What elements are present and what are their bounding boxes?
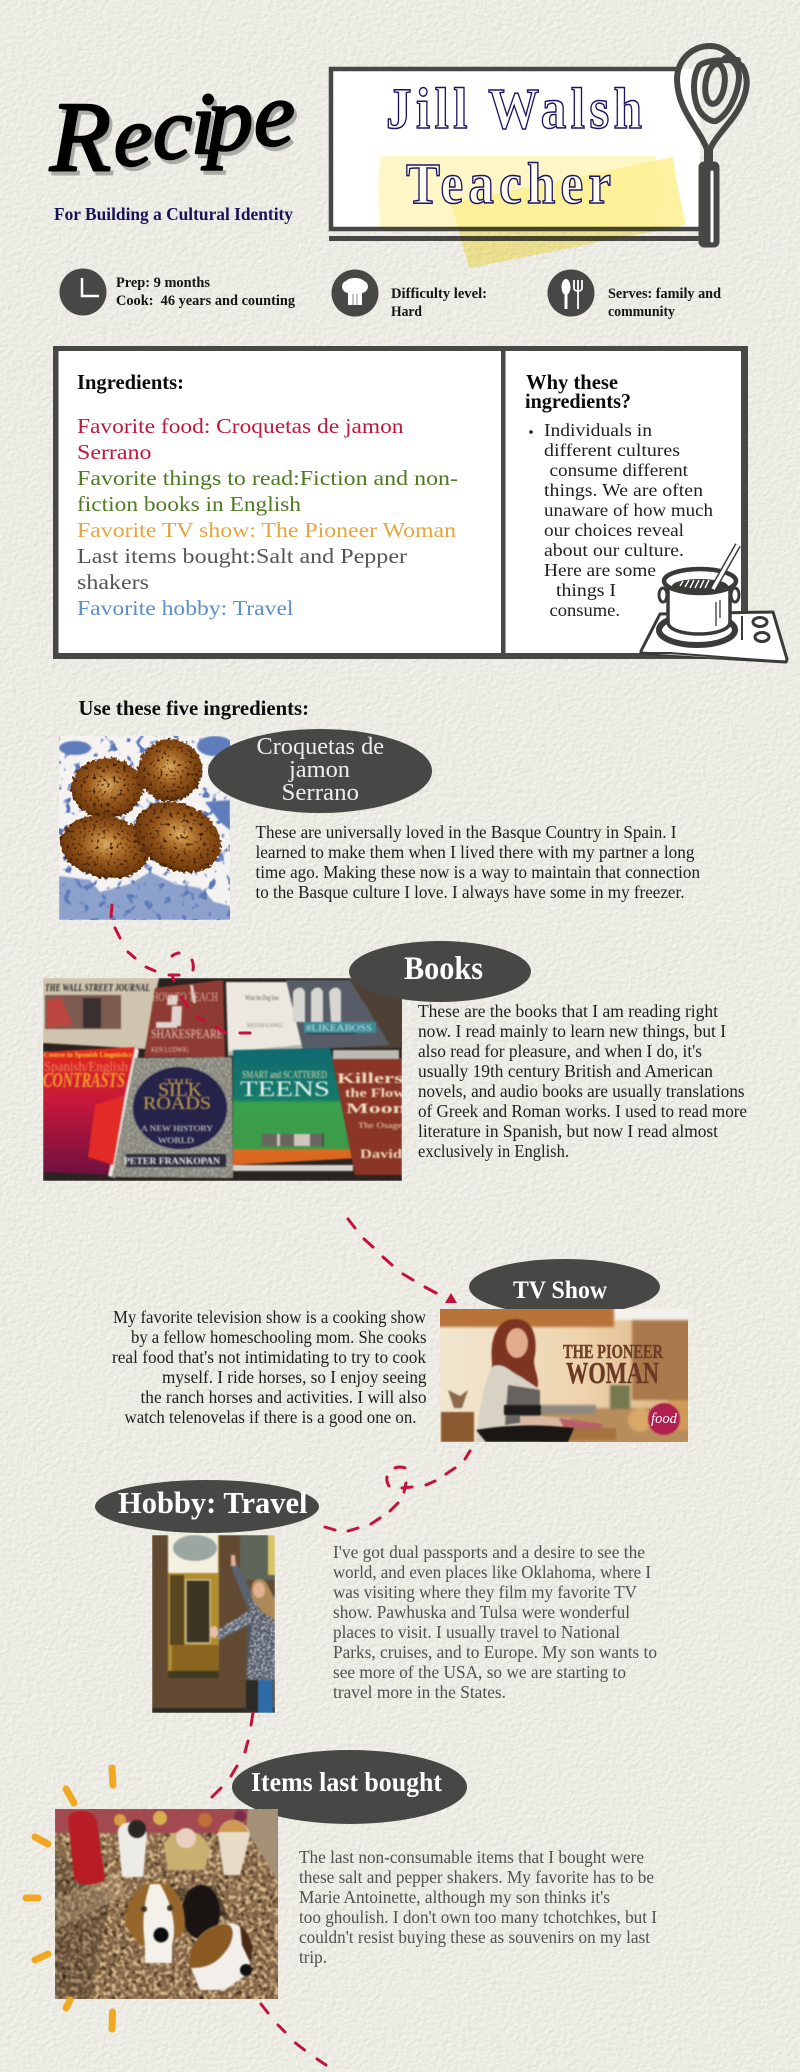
photo: stack of books: SMART and SCATTERED bbox=[242, 1069, 327, 1081]
decoration: orange sun rays bbox=[26, 1768, 113, 2029]
photo: stack of books: Killers bbox=[337, 1071, 403, 1087]
text: TV show: myself. I ride horses, so I enjoy seeing bbox=[162, 1367, 427, 1387]
ingredient list: Last items bought:Salt and Pepper bbox=[77, 544, 407, 568]
stat: prep and cook time: Prep: 9 months bbox=[116, 275, 210, 291]
panel: ingredients and why bbox=[53, 346, 748, 659]
text: travel: world, and even places like Oklahoma, where I bbox=[333, 1562, 651, 1582]
arrow: route continuing off page bbox=[261, 2004, 326, 2065]
stat: prep and cook time: Cook: 46 years and counting bbox=[116, 293, 296, 309]
text: TV show: real food that's not intimidating to try to cook bbox=[112, 1347, 426, 1367]
heading: Why these ingredients: Why these bbox=[526, 370, 618, 394]
heading pill: Hobby Travel bbox=[95, 1480, 319, 1533]
arrow: route from books to TV show bbox=[348, 1219, 457, 1303]
text: travel: I've got dual passports and a desire to see the bbox=[333, 1542, 645, 1562]
why text: our choices reveal bbox=[544, 520, 684, 540]
photo: stack of books: HOW TO TEACH bbox=[152, 989, 218, 1004]
text: books: usually 19th century British and American bbox=[418, 1061, 713, 1081]
why text: Individuals in bbox=[544, 420, 652, 440]
text: travel bbox=[333, 1542, 657, 1702]
heading pill: Items last bought: Items last bought bbox=[251, 1767, 442, 1797]
photo: The Pioneer Woman: food bbox=[651, 1411, 677, 1427]
heading pill: Books bbox=[349, 941, 531, 1002]
text: items last bought: trip. bbox=[299, 1947, 327, 1967]
photo: stack of books: KEN LUDWIG bbox=[151, 1046, 189, 1054]
stat: prep and cook time bbox=[60, 268, 296, 316]
text: items last bought: too ghoulish. I don't own too many tchotchkes, but I bbox=[299, 1907, 657, 1927]
heading pill: Items last bought bbox=[232, 1750, 467, 1824]
photo: stack of books: PETER FRANKOPAN bbox=[124, 1156, 221, 1166]
stat: difficulty: Difficulty level: bbox=[391, 286, 487, 302]
text: books bbox=[418, 1001, 747, 1161]
title: Recipe: i bbox=[191, 76, 215, 173]
heading: Why these ingredients: ingredients? bbox=[525, 389, 631, 413]
tape: yellow highlight bbox=[378, 156, 686, 268]
text: travel: was visiting where they film my favorite TV bbox=[333, 1582, 637, 1602]
ingredient list: Favorite TV show: The Pioneer Woman bbox=[77, 518, 457, 542]
icon: chef hat bbox=[332, 270, 378, 316]
photo: stack of books: ROADS bbox=[143, 1093, 211, 1113]
text: books: of Greek and Roman works. I used to read more bbox=[418, 1101, 747, 1121]
photo: stack of books: David bbox=[360, 1146, 403, 1161]
text: items last bought: these salt and pepper shakers. My favorite has to be bbox=[299, 1867, 654, 1887]
title: Recipe: p bbox=[201, 68, 253, 170]
stat: difficulty: Hard bbox=[391, 304, 422, 320]
text: books: now. I read mainly to learn new things, but I bbox=[418, 1021, 726, 1041]
text: croquetas: These are universally loved in the Basque Country in Spain. I bbox=[256, 822, 677, 842]
ingredient list: fiction books in English bbox=[77, 492, 302, 516]
title: Recipe: c bbox=[153, 81, 192, 178]
title: Recipe: e bbox=[114, 88, 152, 184]
photo: The Pioneer Woman: WOMAN bbox=[566, 1355, 659, 1390]
text: croquetas bbox=[256, 822, 700, 902]
subtitle: For Building a Cultural Identity bbox=[54, 204, 293, 224]
text: travel: places to visit. I usually travel to National bbox=[333, 1622, 620, 1642]
icon: pot on stove bbox=[641, 545, 787, 662]
photo: stack of books: A NEW HISTORY bbox=[141, 1124, 213, 1133]
text: TV show: My favorite television show is a cooking show bbox=[113, 1307, 426, 1327]
name card bbox=[329, 69, 700, 268]
photo: stack of books: #LIKEABOSS bbox=[306, 1023, 372, 1033]
photo: stack of books: CONTRASTS bbox=[43, 1068, 125, 1092]
photo: stack of books: THE bbox=[165, 1078, 193, 1086]
why text: consume different bbox=[550, 460, 688, 480]
text: travel: see more of the USA, so we are starting to bbox=[333, 1662, 626, 1682]
photo: stack of books: SHAKESPEARE bbox=[151, 1026, 223, 1041]
text: croquetas: to the Basque culture I love. I always have some in my freezer. bbox=[256, 882, 684, 902]
text: items last bought: The last non-consumable items that I bought were bbox=[299, 1847, 644, 1867]
photo: The Pioneer Woman: THE PIONEER bbox=[563, 1341, 663, 1363]
heading: Ingredients: Ingredients: bbox=[77, 370, 184, 394]
title: Recipe: e bbox=[254, 63, 295, 165]
why text: about our culture. bbox=[544, 540, 684, 560]
ingredient list bbox=[77, 414, 458, 620]
heading pill: Hobby Travel: Hobby: Travel bbox=[118, 1485, 308, 1520]
heading: Use these five ingredients: Use these five ingredients: bbox=[78, 696, 309, 720]
photo: stack of books bbox=[43, 978, 410, 1181]
heading pill: Croquetas de jamon Serrano: jamon bbox=[288, 757, 350, 783]
heading pill: TV Show bbox=[469, 1259, 660, 1315]
photo: stack of books: THE WALL STREET JOURNAL bbox=[45, 983, 150, 994]
text: books: novels, and audio books are usually translations bbox=[418, 1081, 745, 1101]
icon: clock bbox=[60, 268, 106, 316]
why text bbox=[529, 420, 713, 620]
stat: serves: community bbox=[608, 304, 676, 320]
photo: The Pioneer Woman bbox=[440, 1309, 688, 1442]
arrow: route from croquetas to books bbox=[111, 905, 250, 1033]
heading pill: Books: Books bbox=[404, 951, 483, 987]
photo: stack of books: The Osage bbox=[358, 1121, 403, 1130]
heading pill: Croquetas de jamon Serrano: Serrano bbox=[282, 780, 359, 806]
heading pill: Croquetas de jamon Serrano: Croquetas de bbox=[256, 734, 384, 760]
text: items last bought: Marie Antoinette, although my son thinks it's bbox=[299, 1887, 610, 1907]
why text: things. We are often bbox=[544, 480, 703, 500]
photo: stack of books: What the Dog Saw bbox=[245, 994, 280, 1002]
icon: whisk bbox=[677, 46, 747, 246]
icon: spoon and fork bbox=[548, 270, 594, 316]
why text: unaware of how much bbox=[544, 500, 713, 520]
title: Recipe: R bbox=[49, 81, 111, 192]
text: TV show: watch telenovelas if there is a good one on. bbox=[124, 1407, 416, 1427]
photo: stack of books: Moon bbox=[346, 1101, 407, 1117]
photo: croquetas on a blue plate bbox=[55, 732, 233, 920]
why text: Here are some bbox=[544, 560, 656, 580]
photo: stack of books: SILK bbox=[158, 1079, 203, 1101]
why text: different cultures bbox=[544, 440, 680, 460]
heading pill: TV Show: TV Show bbox=[513, 1277, 607, 1304]
text: books: exclusively in English. bbox=[418, 1141, 569, 1161]
why text: consume. bbox=[550, 600, 620, 620]
name: Jill Walsh: Jill Walsh bbox=[386, 76, 642, 141]
stat: serves: Serves: family and bbox=[608, 286, 721, 302]
text: books: literature in Spanish, but now I read almost bbox=[418, 1121, 718, 1141]
photo: stack of books: the Flow bbox=[345, 1085, 406, 1100]
stat: serves bbox=[548, 270, 721, 320]
text: items last bought: couldn't resist buying these as souvenirs on my last bbox=[299, 1927, 650, 1947]
text: items last bought bbox=[299, 1847, 657, 1967]
text: TV show: the ranch horses and activities. I will also bbox=[140, 1387, 427, 1407]
photo: stack of books: WORLD bbox=[158, 1136, 194, 1145]
text: croquetas: time ago. Making these now is a way to maintain that connection bbox=[256, 862, 700, 882]
photo: salt and pepper shakers bbox=[50, 1805, 283, 2003]
photo: travel doorway bbox=[152, 1535, 275, 1713]
text: travel: travel more in the States. bbox=[333, 1682, 506, 1702]
text: books: These are the books that I am reading right bbox=[418, 1001, 718, 1021]
text: travel: show. Pawhuska and Tulsa were wonderful bbox=[333, 1602, 630, 1622]
photo: stack of books: MALCOLM GLADWELL bbox=[247, 1023, 283, 1029]
heading pill: Croquetas de jamon Serrano bbox=[208, 729, 432, 813]
text: TV show bbox=[112, 1307, 427, 1427]
why text: things I bbox=[556, 580, 616, 600]
photo: stack of books: Course in Spanish Linguistics bbox=[44, 1051, 132, 1059]
photo: stack of books: TEENS bbox=[240, 1076, 330, 1101]
stat: difficulty bbox=[332, 270, 487, 320]
ingredient list: Serrano bbox=[77, 440, 152, 464]
title: Recipe bbox=[49, 63, 295, 192]
ingredient list: Favorite things to read:Fiction and non- bbox=[77, 466, 458, 490]
ingredient list: shakers bbox=[77, 570, 149, 594]
photo: stack of books: Spanish/English bbox=[44, 1060, 128, 1075]
text: croquetas: learned to make them when I lived there with my partner a long bbox=[256, 842, 695, 862]
text: travel: Parks, cruises, and to Europe. My son wants to bbox=[333, 1642, 657, 1662]
role: Teacher: Teacher bbox=[406, 151, 611, 216]
heading: Why these ingredients bbox=[525, 370, 631, 413]
arrow: route from TV show to travel bbox=[325, 1451, 470, 1531]
ingredient list: Favorite hobby: Travel bbox=[77, 596, 294, 620]
text: TV show: by a fellow homeschooling mom. She cooks bbox=[131, 1327, 427, 1347]
ingredient list: Favorite food: Croquetas de jamon bbox=[77, 414, 404, 438]
arrow: route from travel to items bbox=[212, 1713, 253, 1797]
text: books: also read for pleasure, and when I do, it's bbox=[418, 1041, 702, 1061]
